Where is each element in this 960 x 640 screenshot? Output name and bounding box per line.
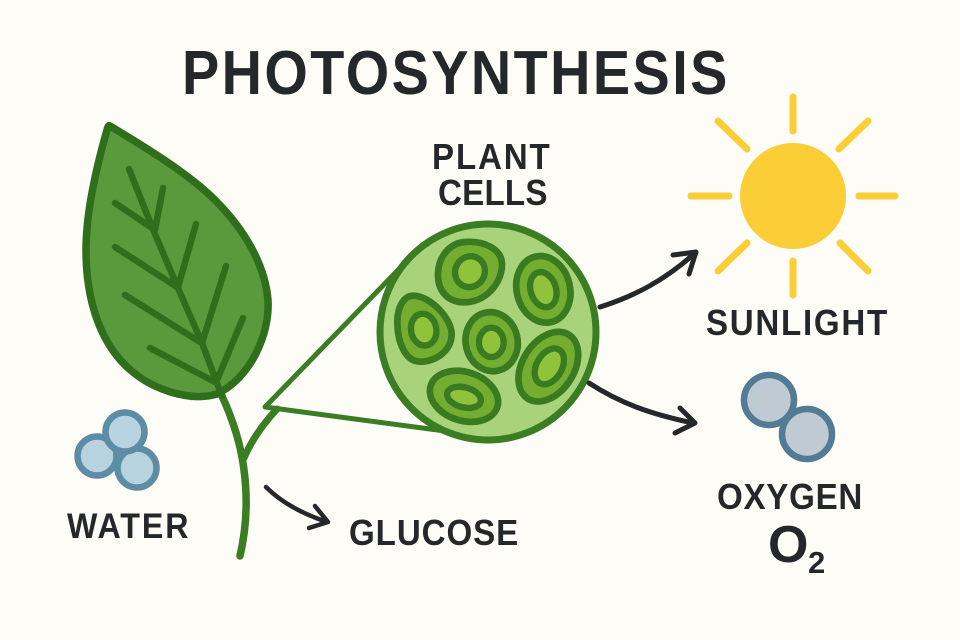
label: plant cells: PLANT bbox=[432, 138, 550, 177]
arrow: to glucose bbox=[266, 487, 328, 528]
label: sunlight: SUNLIGHT bbox=[706, 304, 887, 343]
panel: plant cell circle bbox=[380, 224, 596, 440]
cell group bbox=[397, 242, 591, 430]
label: O2 formula: O bbox=[768, 516, 808, 574]
icon: oxygen molecule bbox=[744, 375, 832, 459]
cell 3 bbox=[397, 296, 452, 362]
label: O2 formula bbox=[768, 516, 825, 580]
cell 2 bbox=[509, 250, 577, 328]
callout: zoom lines from stem to cell circle bbox=[265, 268, 445, 431]
label: oxygen: OXYGEN bbox=[717, 478, 862, 517]
label: glucose: GLUCOSE bbox=[349, 514, 518, 553]
cell 1 bbox=[438, 242, 502, 302]
label: plant cells bbox=[432, 138, 550, 213]
icon: sun bbox=[691, 97, 895, 295]
cell 6 bbox=[423, 362, 505, 430]
arrow: cells to sunlight bbox=[600, 252, 696, 307]
label: water: WATER bbox=[67, 508, 188, 546]
icon: leaf bbox=[86, 126, 268, 396]
title: PHOTOSYNTHESIS bbox=[182, 39, 727, 108]
icon: plant stem bbox=[222, 396, 277, 556]
label: O2 formula: 2 bbox=[808, 545, 825, 580]
cell 4 bbox=[460, 307, 523, 376]
label: plant cells: CELLS bbox=[438, 174, 547, 213]
cell 5 bbox=[506, 321, 591, 413]
arrow: cells to oxygen bbox=[589, 383, 695, 433]
icon: water molecules bbox=[78, 412, 156, 488]
